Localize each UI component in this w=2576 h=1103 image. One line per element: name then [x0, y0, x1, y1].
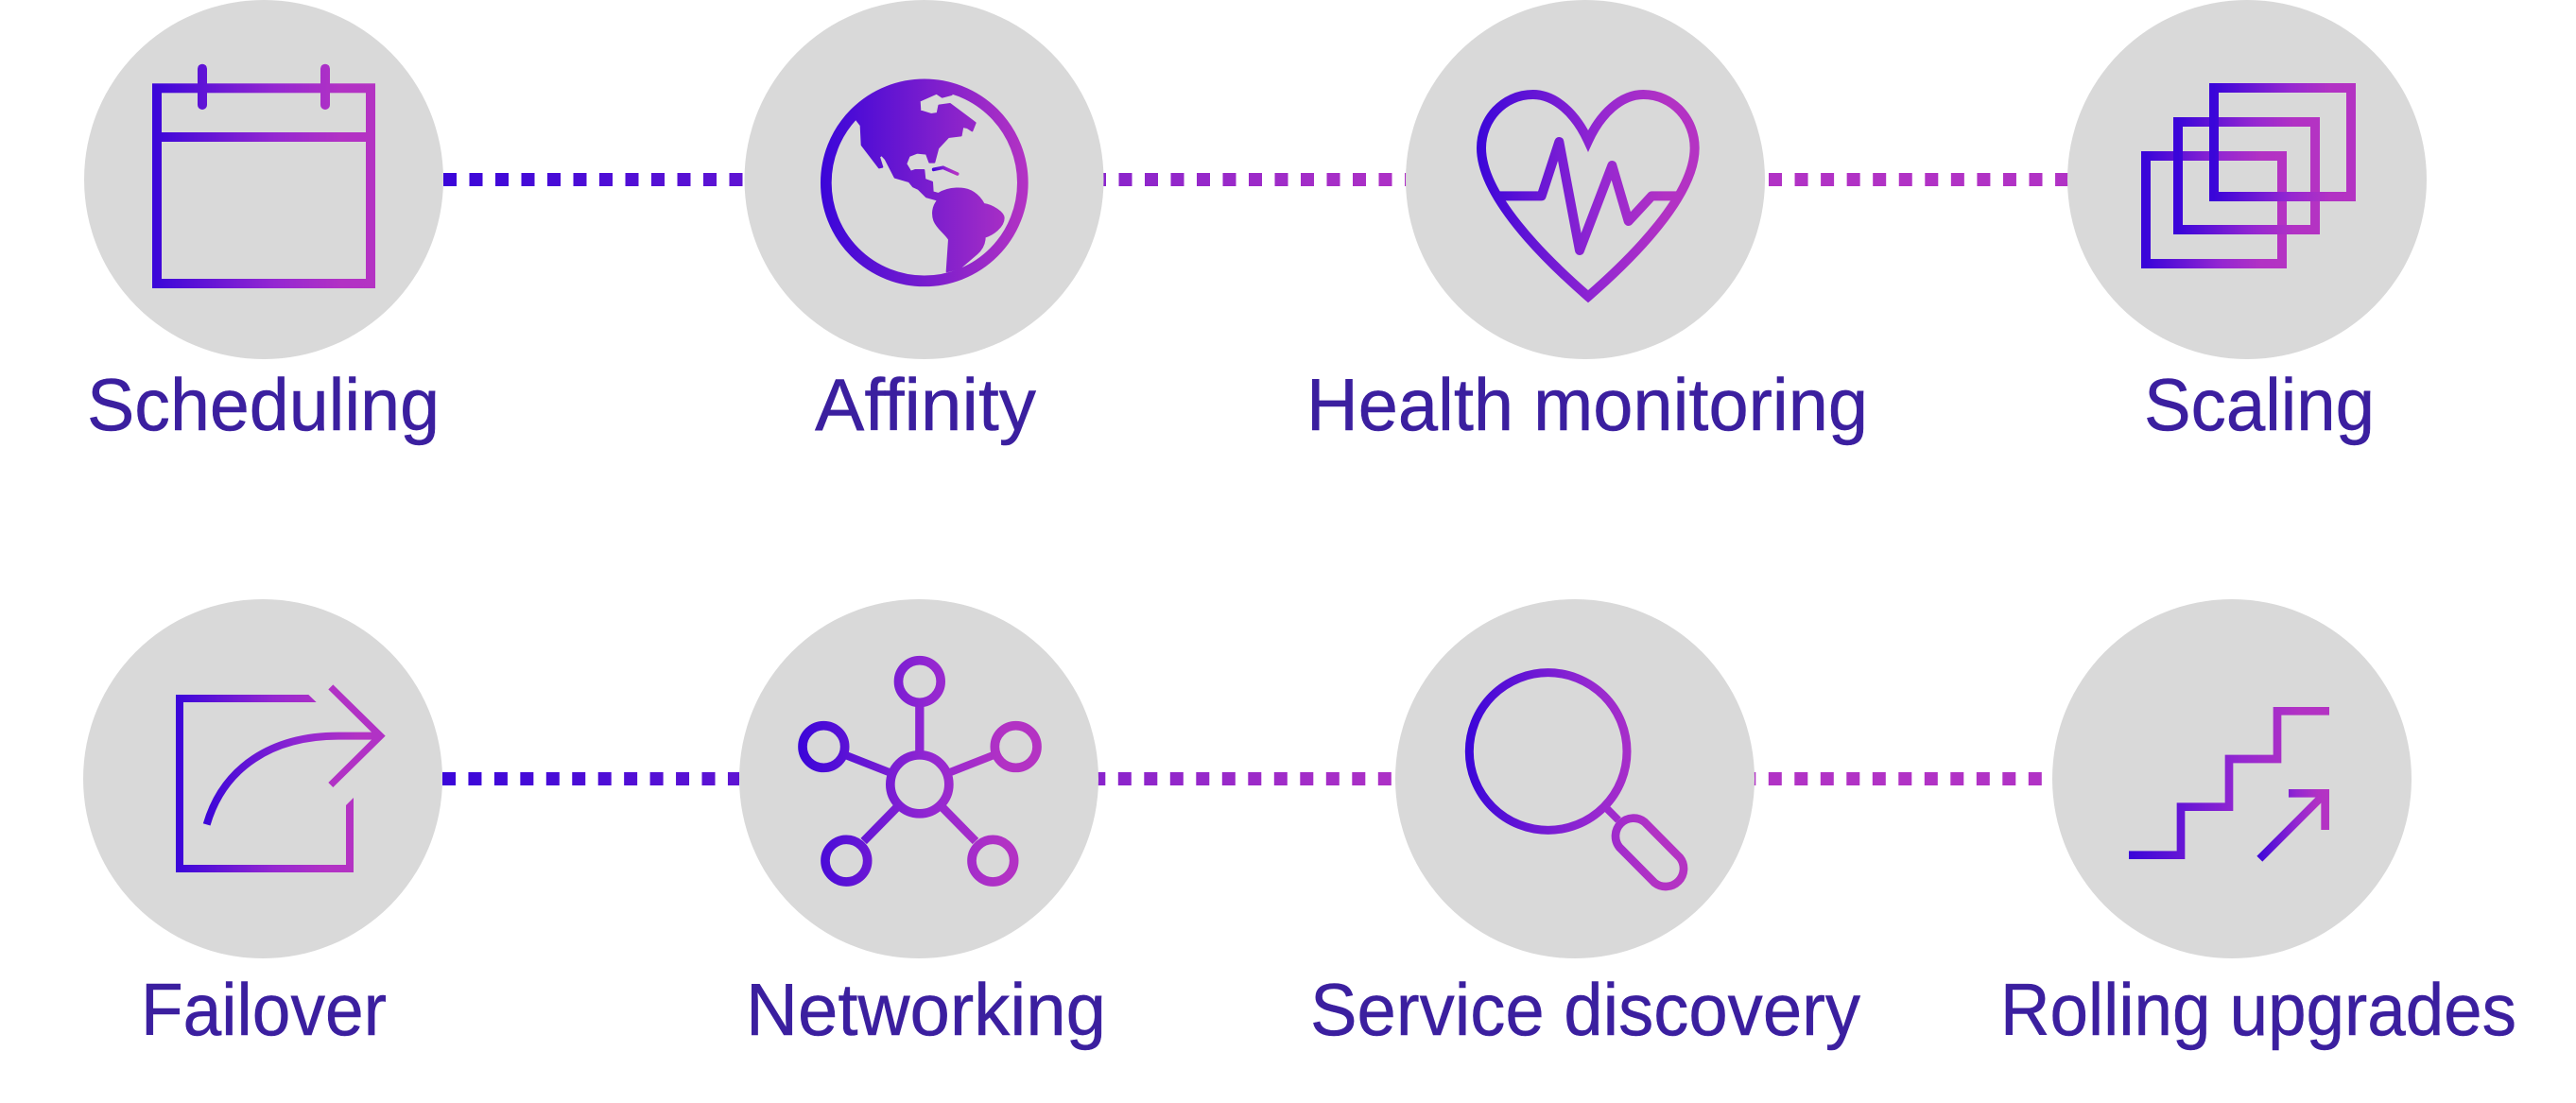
item: Scheduling — [84, 0, 443, 446]
circle background — [83, 599, 442, 958]
icon: magnifying glass — [1469, 673, 1684, 887]
item: Service discovery — [1310, 599, 1860, 1051]
label: Scheduling — [87, 363, 440, 446]
icon: hub and spoke network — [803, 661, 1037, 882]
label: Networking — [746, 968, 1106, 1051]
icon: stacked rectangles — [2146, 88, 2351, 264]
circle background — [1406, 0, 1765, 359]
circle background — [2067, 0, 2427, 359]
icon: box with exit arrow — [176, 684, 386, 872]
label: Affinity — [815, 363, 1036, 446]
item: Failover — [83, 599, 442, 1051]
circle background — [745, 0, 1104, 359]
circle background — [739, 599, 1098, 958]
label: Service discovery — [1310, 968, 1860, 1051]
label: Scaling — [2144, 363, 2375, 446]
circle background — [2052, 599, 2412, 958]
label: Rolling upgrades — [2000, 968, 2516, 1051]
connector: Failover to Networking — [442, 772, 739, 785]
item: Networking — [739, 599, 1106, 1051]
circle background — [1395, 599, 1755, 958]
connector: Affinity to Health monitoring — [1093, 173, 1406, 186]
connector: Service discovery to Rolling upgrades — [1742, 772, 2042, 785]
item: Affinity — [745, 0, 1104, 446]
item: Health monitoring — [1306, 0, 1868, 446]
icon: stairs with arrow — [2129, 711, 2329, 859]
item: Scaling — [2067, 0, 2427, 446]
connector: Scheduling to Affinity — [443, 173, 744, 186]
circle background — [84, 0, 443, 359]
icon: globe — [826, 84, 1023, 281]
icon: calendar — [152, 69, 375, 284]
label: Failover — [141, 968, 387, 1051]
icon: heart with pulse — [1481, 95, 1695, 297]
label: Health monitoring — [1306, 363, 1868, 446]
connector: Health monitoring to Scaling — [1769, 173, 2068, 186]
connector: Networking to Service discovery — [1092, 772, 1392, 785]
item: Rolling upgrades — [2000, 599, 2516, 1051]
